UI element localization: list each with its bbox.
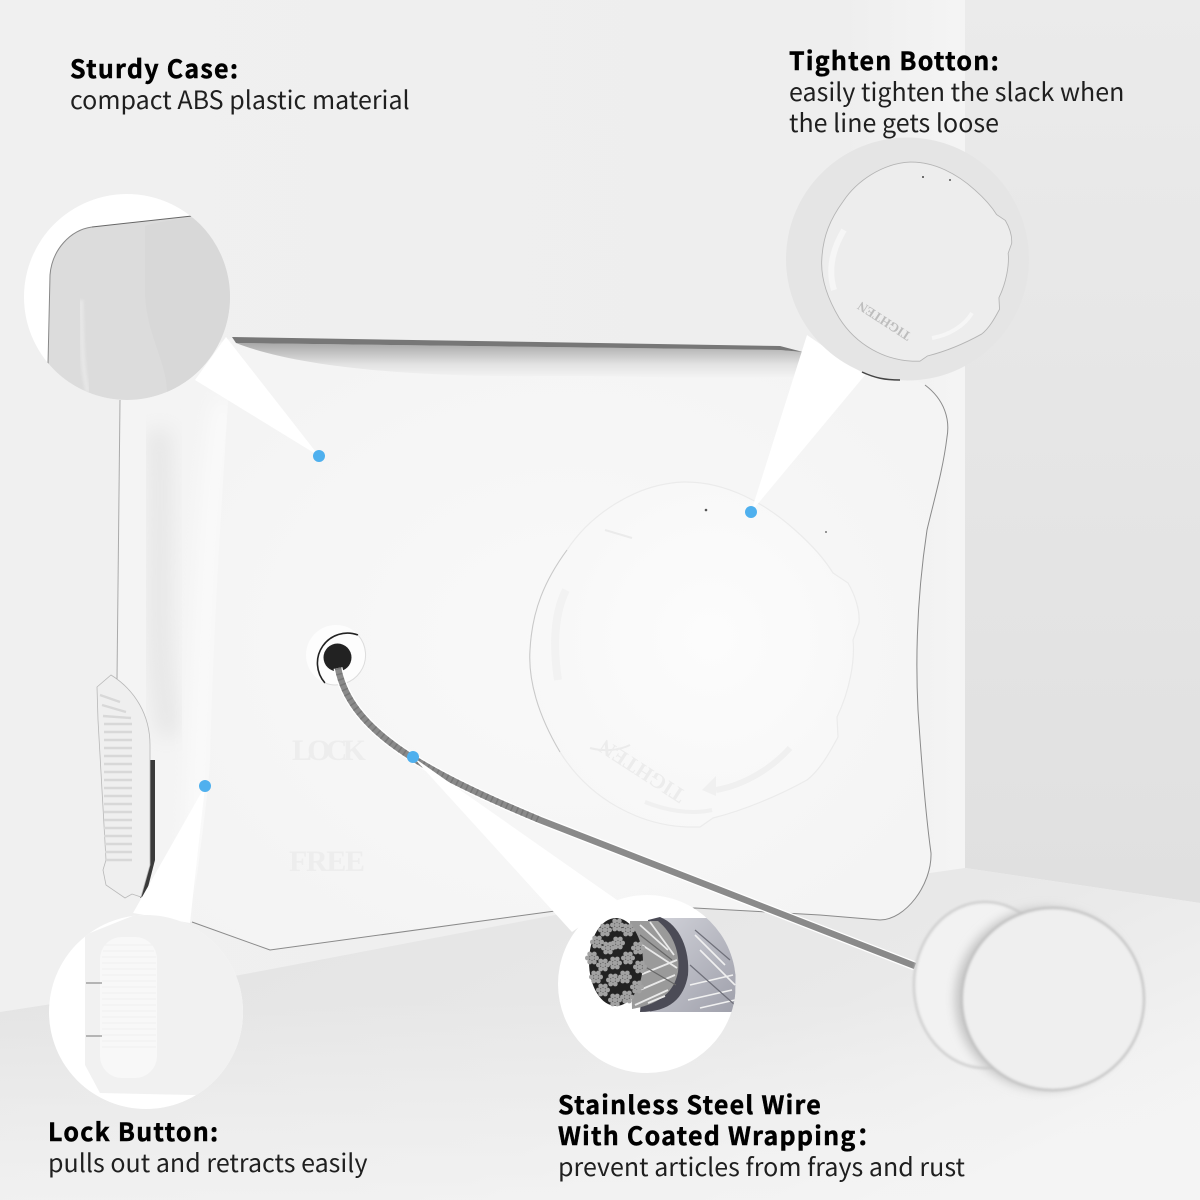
text: tighten button xyxy=(789,42,1124,140)
callout: tighten button magnifier: TIGHTEN xyxy=(854,298,914,344)
device top groove xyxy=(232,337,803,379)
text: sturdy case xyxy=(70,50,410,117)
text: stainless steel wire xyxy=(558,1086,965,1184)
tighten knob xyxy=(530,482,859,827)
wire end cap xyxy=(914,902,1144,1090)
text: stainless steel wire: Stainless Steel Wire xyxy=(558,1086,822,1122)
text: tighten button: Tighten Botton: xyxy=(789,42,1000,78)
callout pointers xyxy=(133,335,865,932)
indicator dots xyxy=(199,450,757,792)
callout: sturdy case magnifier xyxy=(24,194,240,410)
device side wall xyxy=(117,338,300,922)
callout: wire cross-section magnifier xyxy=(558,895,736,1073)
device body xyxy=(192,338,948,950)
text: stainless steel wire: With Coated Wrapping： xyxy=(558,1117,883,1153)
cable port xyxy=(306,625,366,685)
callout: lock button magnifier xyxy=(49,915,250,1109)
embossed labels on case: LOCK xyxy=(292,734,367,767)
text: sturdy case: Sturdy Case: xyxy=(70,50,239,86)
embossed labels on case: FREE xyxy=(289,845,365,878)
embossed labels on case xyxy=(289,734,367,878)
text: sturdy case: compact ABS plastic material xyxy=(70,81,410,117)
text: lock button xyxy=(48,1113,368,1180)
device outline xyxy=(192,385,948,950)
text: lock button: pulls out and retracts easily xyxy=(48,1144,368,1180)
text: tighten button: the line gets loose xyxy=(789,104,999,140)
steel wire xyxy=(338,668,915,966)
text: lock button: Lock Button: xyxy=(48,1113,219,1149)
shadow under tighten magnifier xyxy=(862,372,900,380)
lock slider xyxy=(97,675,155,898)
tighten knob: TIGHTEN xyxy=(594,734,690,808)
text: tighten button: easily tighten the slack when xyxy=(789,73,1124,109)
text: stainless steel wire: prevent articles from frays and rust xyxy=(558,1148,965,1184)
callout: tighten button magnifier xyxy=(786,138,1029,380)
